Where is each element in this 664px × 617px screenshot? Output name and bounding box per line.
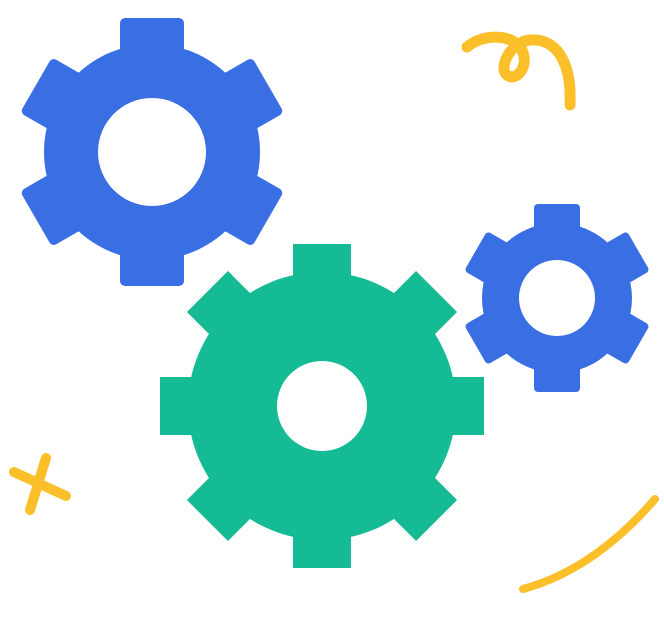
doodle: yellow arc bbox=[523, 499, 655, 589]
gear: green center bbox=[160, 244, 484, 568]
doodle: yellow x bbox=[14, 458, 66, 510]
gear: large blue top-left bbox=[20, 18, 284, 286]
doodle: yellow curl bbox=[467, 37, 570, 105]
gear: small blue right bbox=[464, 204, 650, 392]
